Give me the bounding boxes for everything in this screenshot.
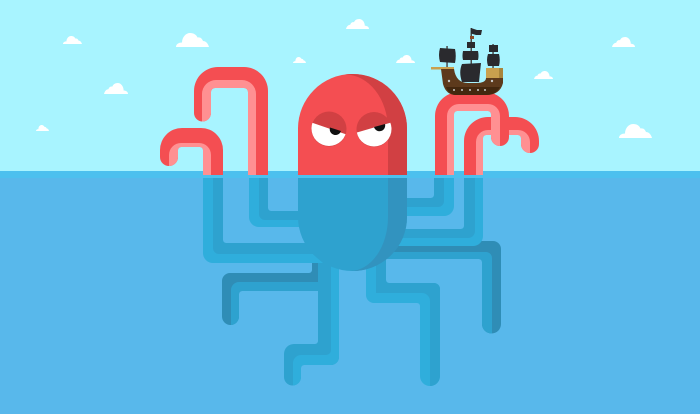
sky — [0, 0, 700, 171]
cloud 1 — [63, 36, 82, 44]
flag — [471, 28, 482, 35]
big right underwater tentacle — [385, 178, 483, 246]
underwater tentacles — [203, 178, 501, 386]
cloud 4 — [36, 125, 49, 131]
cloud 7 — [396, 55, 415, 63]
big left underwater tentacle — [203, 178, 330, 263]
sails — [439, 42, 500, 82]
pirate ship — [431, 28, 503, 95]
sea — [0, 171, 700, 414]
cloud 6 — [293, 57, 306, 63]
lower right tentacle — [366, 250, 440, 386]
hull — [441, 69, 503, 95]
crow's nest — [470, 36, 474, 39]
raised tentacle under ship — [435, 92, 509, 175]
small left underwater tentacle — [249, 178, 310, 227]
waterline band — [0, 171, 700, 178]
small right underwater tentacle — [395, 178, 454, 216]
cloud 9 — [534, 71, 553, 79]
bow plank — [431, 67, 454, 70]
kraken head — [298, 74, 407, 175]
clouds — [36, 19, 652, 138]
hull lower strip — [446, 87, 500, 95]
raised big left tentacle — [194, 67, 268, 175]
raised tentacle far right — [464, 117, 539, 175]
left eye — [312, 112, 346, 146]
cloud 10 — [619, 124, 652, 138]
back right tentacle — [385, 241, 501, 334]
centre lower tentacle — [284, 250, 339, 386]
underwater body — [298, 178, 407, 271]
head shading — [345, 74, 407, 175]
cloud 2 — [176, 33, 209, 47]
portholes — [448, 80, 493, 91]
stern cabin — [486, 68, 503, 78]
right eye — [356, 112, 392, 147]
cloud 5 — [346, 19, 369, 29]
cloud 8 — [612, 37, 635, 47]
cloud 3 — [104, 83, 128, 94]
back left tentacle — [222, 263, 318, 325]
raised small left tentacle — [160, 128, 223, 175]
masts — [446, 28, 494, 82]
